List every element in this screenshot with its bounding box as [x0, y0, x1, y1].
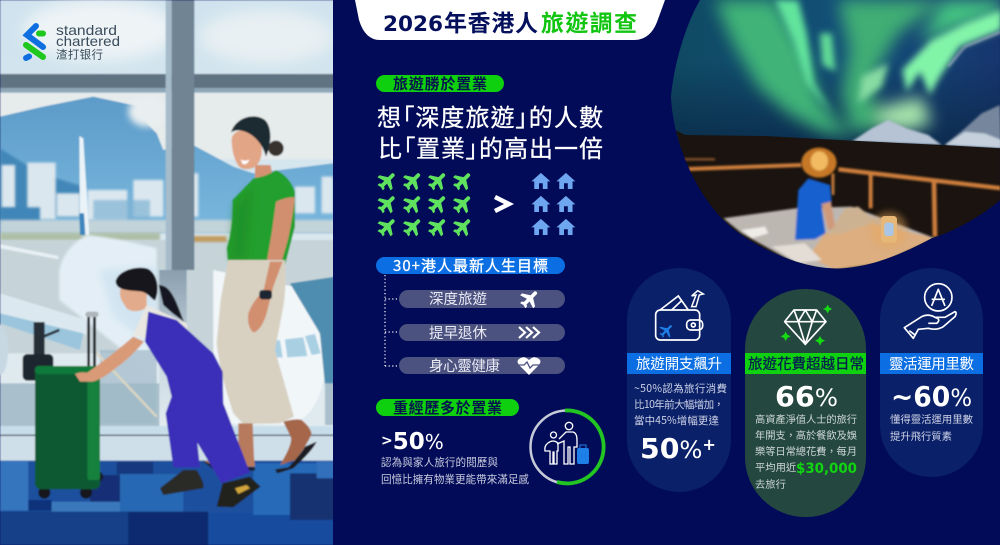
heading [377, 98, 603, 164]
title text [383, 4, 637, 38]
statistic: over 50 percent: % [425, 430, 444, 454]
card: travel spend beyond daily [745, 289, 866, 517]
icon: diamond with sparkles [781, 305, 832, 346]
body text [890, 411, 974, 443]
body text: 年開支，高於餐飲及娛 [755, 427, 857, 442]
tag: experience over property: 重經歷多於置業 [393, 397, 502, 418]
statistic: about 60 percent: ~60% [891, 380, 972, 413]
band: heading: 旅遊花費超越日常 [748, 353, 864, 374]
section: experience over property [376, 397, 604, 487]
tag: travel over property: 旅遊勝於置業 [393, 73, 487, 94]
title banner [355, 0, 665, 40]
heading: 比「置業」的高出一倍 [378, 129, 603, 164]
statistic: 66 percent: 66% [775, 380, 838, 413]
body text: 提升飛行質素 [890, 428, 952, 443]
logo: Standard Chartered [26, 22, 120, 62]
description text: 認為與家人旅行的閱歷與 [381, 455, 498, 470]
logo wordmark: 渣打银行 [56, 46, 103, 62]
description text: 回憶比擁有物業更能帶來滿足感 [381, 472, 529, 487]
photo: aurora scene in rounded blob [665, 0, 1000, 273]
woman: head and green top [227, 116, 295, 272]
donut with family icon [530, 410, 604, 484]
woman: trousers, arm, legs [202, 260, 317, 473]
logo wordmark: chartered [56, 33, 120, 49]
goal: wellbeing: 身心靈健康 [429, 355, 500, 376]
photo: mother and daughter at airport window [0, 0, 347, 545]
goal: early retirement [399, 322, 565, 343]
greater-than sign [495, 197, 509, 211]
body text: 去旅行 [755, 476, 786, 491]
statistic: 50 percent plus: + [702, 435, 716, 454]
goal: deep travel [399, 286, 565, 311]
icon grid: planes [374, 168, 475, 239]
band: heading: 旅遊開支飆升 [636, 353, 722, 374]
logo wordmark: standard [56, 22, 117, 38]
body text: 高資產淨值人士的旅行 [755, 411, 857, 426]
icon: hand holding mile coin [904, 284, 956, 338]
band: heading: 靈活運用里數 [889, 353, 974, 374]
title text: 2026 [383, 12, 443, 36]
body text: ~50%認為旅行消費 [634, 381, 727, 396]
body text: 平均用近 [755, 459, 797, 474]
goal: early retirement: 提早退休 [429, 322, 488, 343]
body text [755, 411, 857, 491]
logo mark [26, 26, 43, 58]
body text: 懂得靈活運用里數 [890, 411, 974, 426]
statistic: over 50 percent: > [381, 433, 393, 449]
heading: 想「深度旅遊」的人數 [377, 98, 603, 133]
icon: wallet with plane [656, 291, 703, 341]
card: travel spending surge [627, 268, 731, 492]
body text [634, 381, 727, 428]
statistic: over 50 percent: 50 [393, 429, 425, 455]
tag: life goals: 30+港人最新人生目標 [393, 255, 548, 276]
section: life goals of 30+ [376, 255, 565, 376]
goal: deep travel: 深度旅遊 [429, 288, 488, 309]
title text: 旅遊調查 [541, 4, 637, 38]
body text: $30,000 [796, 461, 857, 477]
body text: 當中45%增幅更達 [634, 413, 720, 428]
description text [381, 455, 529, 487]
statistic: 50 percent plus: 50% [640, 432, 702, 465]
section: travel beats property [374, 73, 603, 239]
body text: 比10年前大幅增加， [634, 397, 724, 412]
icon grid: houses [531, 173, 575, 235]
card: flexible use of miles [880, 268, 983, 477]
title text: 年香港人 [444, 4, 538, 38]
suitcase [35, 312, 103, 499]
goal: wellbeing [399, 355, 565, 376]
girl [75, 268, 261, 507]
logo wordmark [56, 22, 120, 62]
body text: 樂等日常總花費，每月 [755, 443, 857, 458]
